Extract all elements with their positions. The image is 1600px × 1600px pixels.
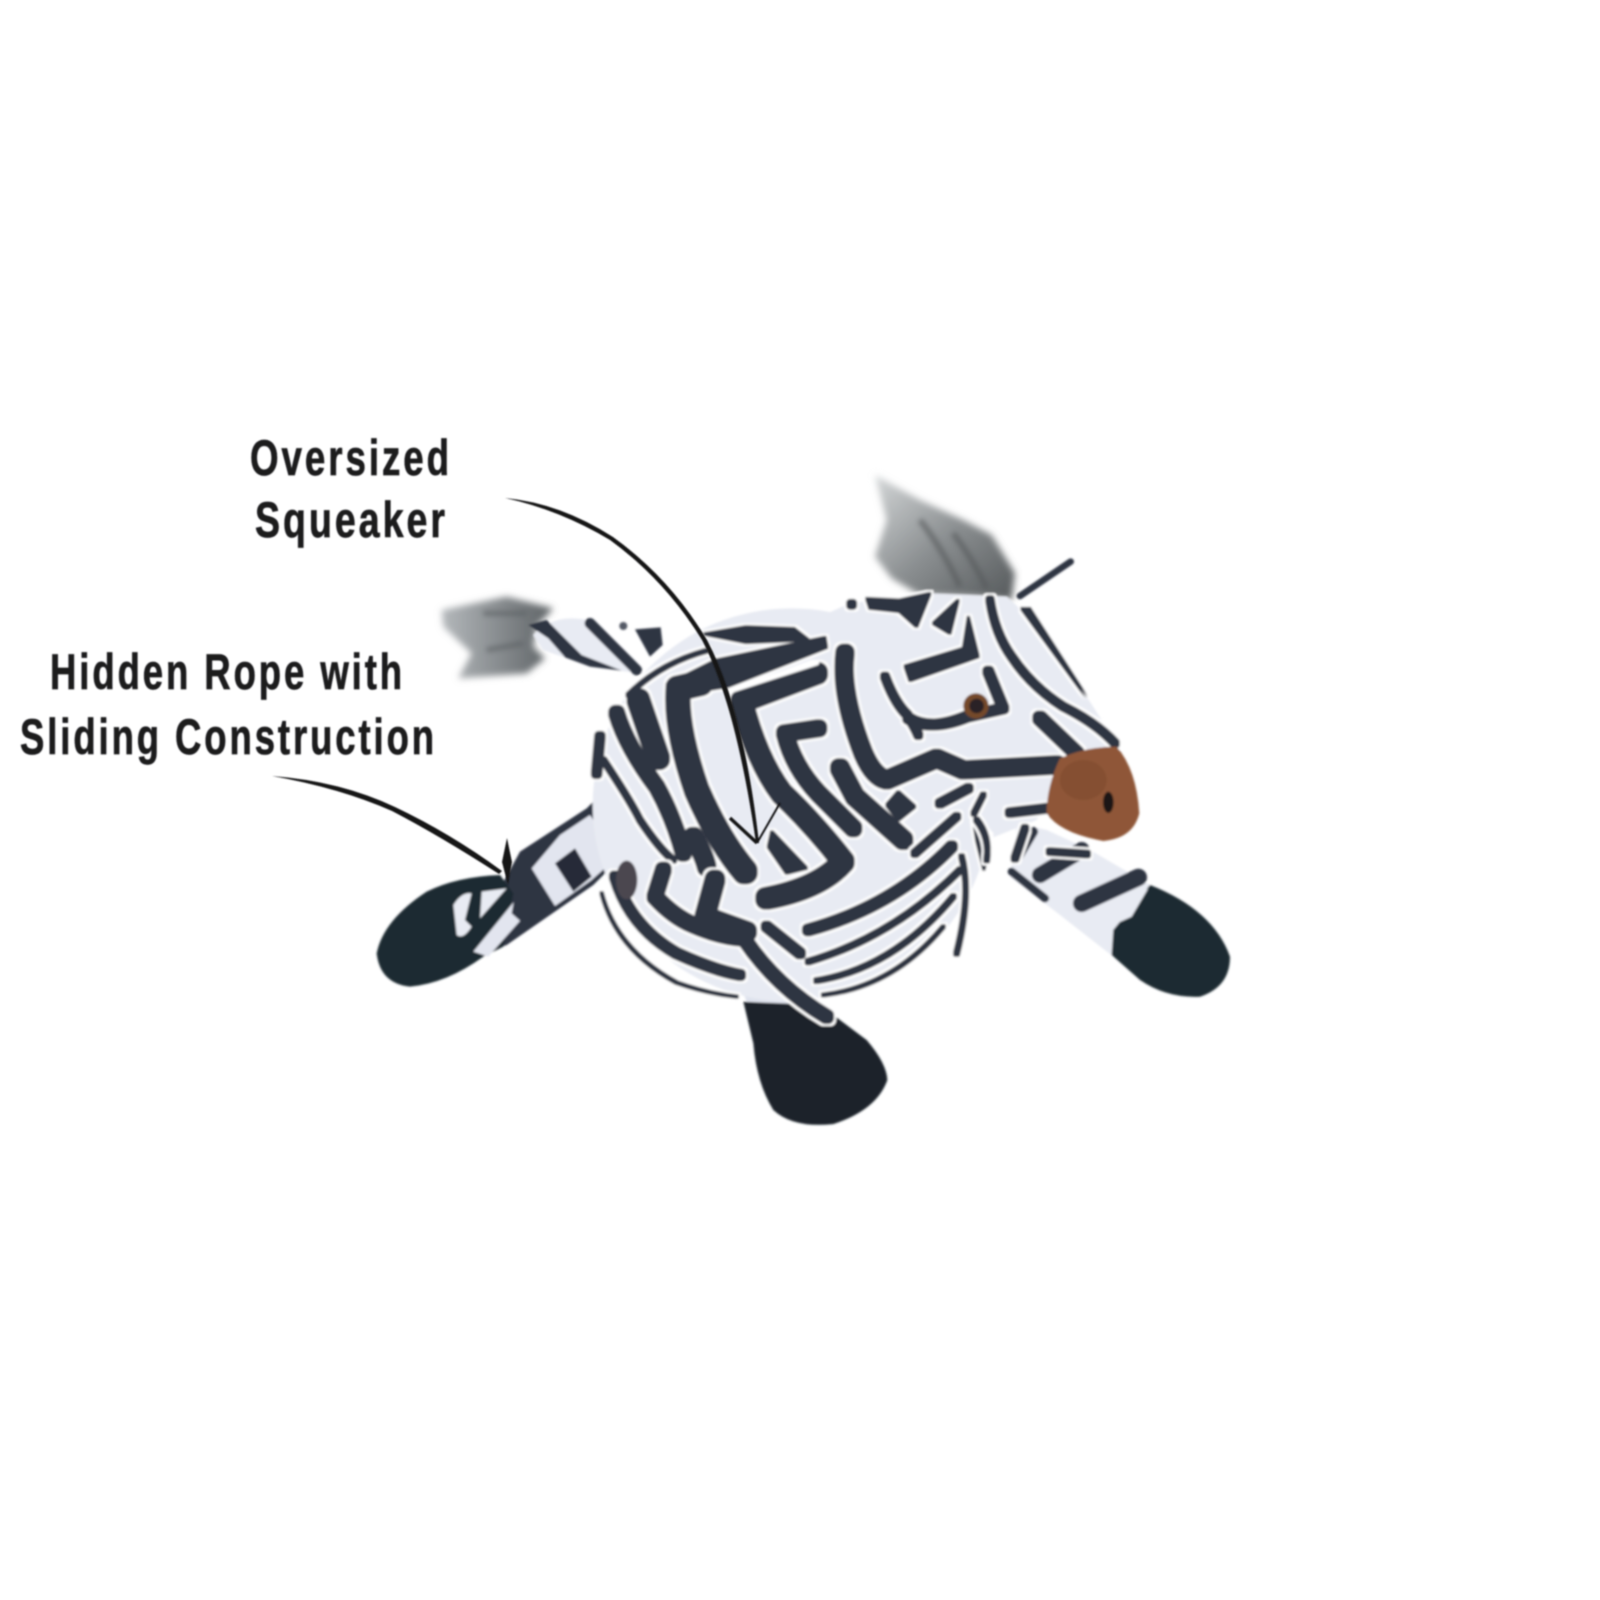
tail: [442, 597, 663, 678]
front left leg with hidden rope: [377, 795, 618, 987]
nose: [1047, 747, 1139, 841]
arrow: oversized squeaker: [505, 498, 780, 843]
body stripes lower: [602, 818, 990, 1017]
front right leg: [1010, 823, 1230, 997]
label: oversized squeaker: Oversized: [250, 430, 452, 486]
head: [844, 593, 1139, 860]
bottom foot: [737, 967, 887, 1125]
arrow: hidden rope: [272, 776, 512, 885]
mane: [875, 475, 1015, 600]
body highlights: [730, 663, 817, 691]
label: hidden rope with sliding construction: Sliding Construction: [20, 709, 437, 765]
eye: [963, 693, 989, 719]
zebra plush toy: [377, 475, 1230, 1125]
label: oversized squeaker: [250, 430, 452, 548]
label: hidden rope with sliding construction: Hidden Rope with: [50, 644, 405, 700]
label: hidden rope with sliding construction: [20, 644, 437, 765]
round striped body: [593, 608, 991, 1017]
label: oversized squeaker: Squeaker: [255, 492, 448, 548]
ear: [1020, 562, 1071, 596]
mane and head base: [820, 475, 1117, 860]
head stripes: [844, 593, 1115, 860]
body stripes upper: [597, 627, 915, 898]
